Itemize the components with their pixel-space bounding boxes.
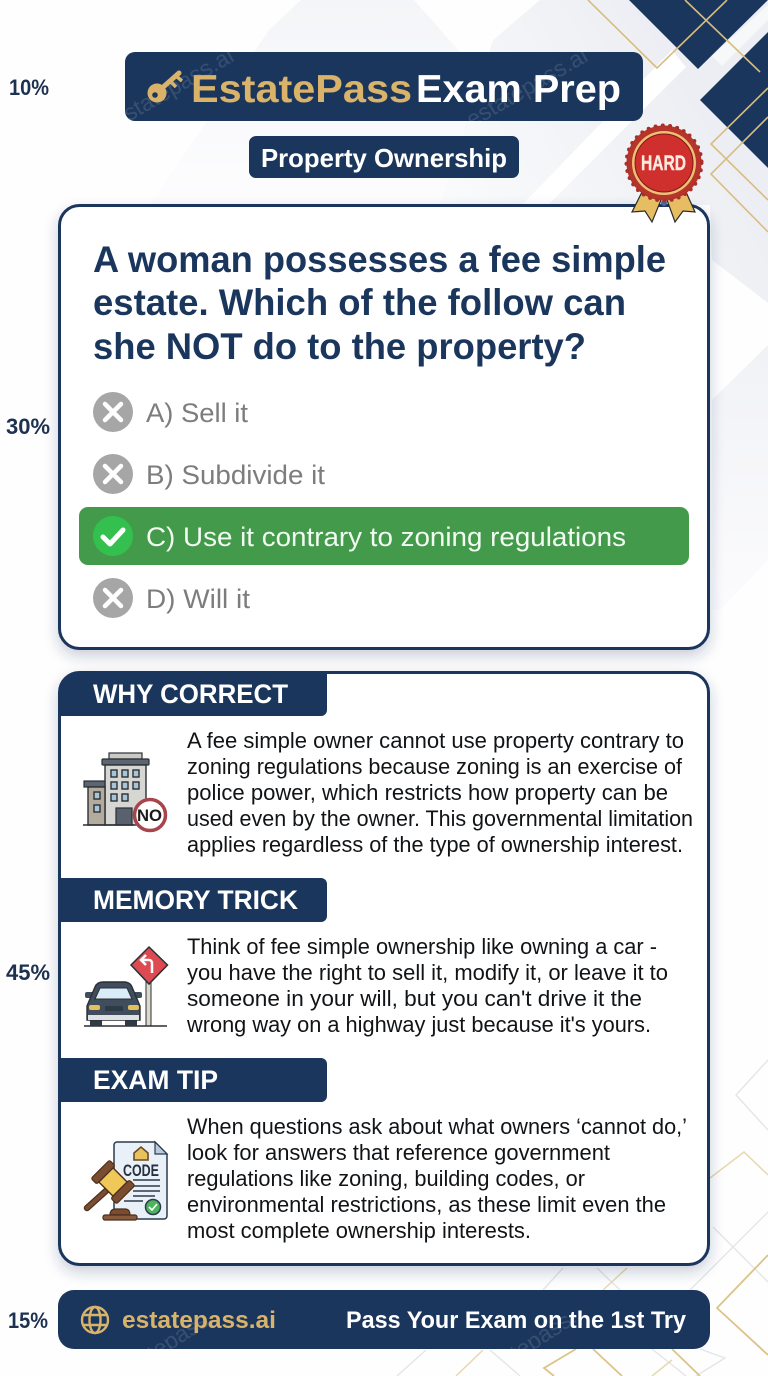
icon: building with NO sign: NO (137, 806, 162, 825)
explanation text: A fee simple owner cannot use property contrary to (187, 728, 684, 753)
progress label 10%: 10% (9, 75, 49, 100)
subtitle: Property Ownership (249, 136, 519, 178)
memory trick text (186, 934, 668, 1037)
progress label 15%: 15% (8, 1308, 48, 1333)
icon: key (148, 73, 182, 102)
footer bar (58, 1290, 710, 1349)
subtitle: Property Ownership: Property Ownership (261, 143, 507, 173)
explanation text (187, 728, 693, 857)
option D (93, 578, 251, 618)
option C: correct answer (79, 507, 689, 565)
option C: correct answer: C) Use it contrary to zoning regulations (146, 522, 626, 552)
explanation text: zoning regulations because zoning is an exercise of (187, 754, 683, 779)
icon: gavel and code document: CODE (123, 1161, 159, 1180)
icon: globe (82, 1307, 108, 1333)
heading: EXAM TIP: EXAM TIP (93, 1065, 218, 1095)
icon: building with NO sign (83, 753, 166, 830)
title banner: EstatePass (191, 68, 412, 111)
explanation text: police power, which restricts how property can be (187, 780, 668, 805)
option A: A) Sell it (146, 398, 248, 428)
section: why correct (59, 672, 693, 857)
badge: HARD rosette (626, 126, 702, 222)
footer bar: estatepass.ai (122, 1307, 276, 1334)
explanation text: applies regardless of the type of ownership interest. (187, 832, 683, 857)
icon: gavel and code document (87, 1142, 167, 1220)
memory trick text: you have the right to sell it, modify it, or leave it to (187, 960, 668, 985)
title banner: Exam Prep (416, 68, 621, 111)
exam tip text: regulations like zoning, building codes, or (187, 1166, 585, 1191)
option B: B) Subdivide it (146, 460, 326, 490)
progress label 30%: 30% (6, 414, 50, 439)
memory trick text: Think of fee simple ownership like owning a car - (187, 934, 657, 959)
memory trick text: wrong way on a highway just because it's yours. (186, 1012, 651, 1037)
exam tip text: look for answers that reference government (187, 1140, 611, 1165)
question text (93, 239, 666, 367)
section: memory trick (59, 878, 668, 1037)
title banner: estatepass.ai (462, 42, 592, 132)
panel: explanation card (59, 672, 708, 1264)
memory trick text: someone in your will, but you can't drive it the (187, 986, 642, 1011)
title banner: estatepass.ai (108, 42, 238, 132)
exam tip text: environmental restrictions, as these limit even the (187, 1192, 666, 1217)
exam tip text (187, 1114, 687, 1243)
heading: WHY CORRECT (59, 672, 327, 716)
progress label 45%: 45% (6, 960, 50, 985)
exam tip text: When questions ask about what owners ‘cannot do,’ (187, 1114, 687, 1139)
panel: question card (60, 206, 708, 648)
explanation text: used even by the owner. This governmental limitation (187, 806, 693, 831)
question text: she NOT do to the property? (93, 326, 586, 367)
option B (93, 454, 326, 494)
title banner (125, 52, 643, 121)
badge: HARD rosette: HARD (641, 152, 686, 175)
question text: estate. Which of the follow can (93, 282, 626, 323)
heading: MEMORY TRICK: MEMORY TRICK (93, 885, 298, 915)
footer bar: Pass Your Exam on the 1st Try (346, 1307, 687, 1334)
option D: D) Will it (146, 584, 251, 614)
heading: MEMORY TRICK (59, 878, 327, 922)
section: exam tip (59, 1058, 687, 1243)
question text: A woman possesses a fee simple (93, 239, 666, 280)
icon: car and turn sign (84, 947, 168, 1026)
exam tip text: most complete ownership interests. (187, 1218, 531, 1243)
option A (93, 392, 248, 432)
heading: WHY CORRECT: WHY CORRECT (93, 679, 288, 709)
heading: EXAM TIP (59, 1058, 327, 1102)
